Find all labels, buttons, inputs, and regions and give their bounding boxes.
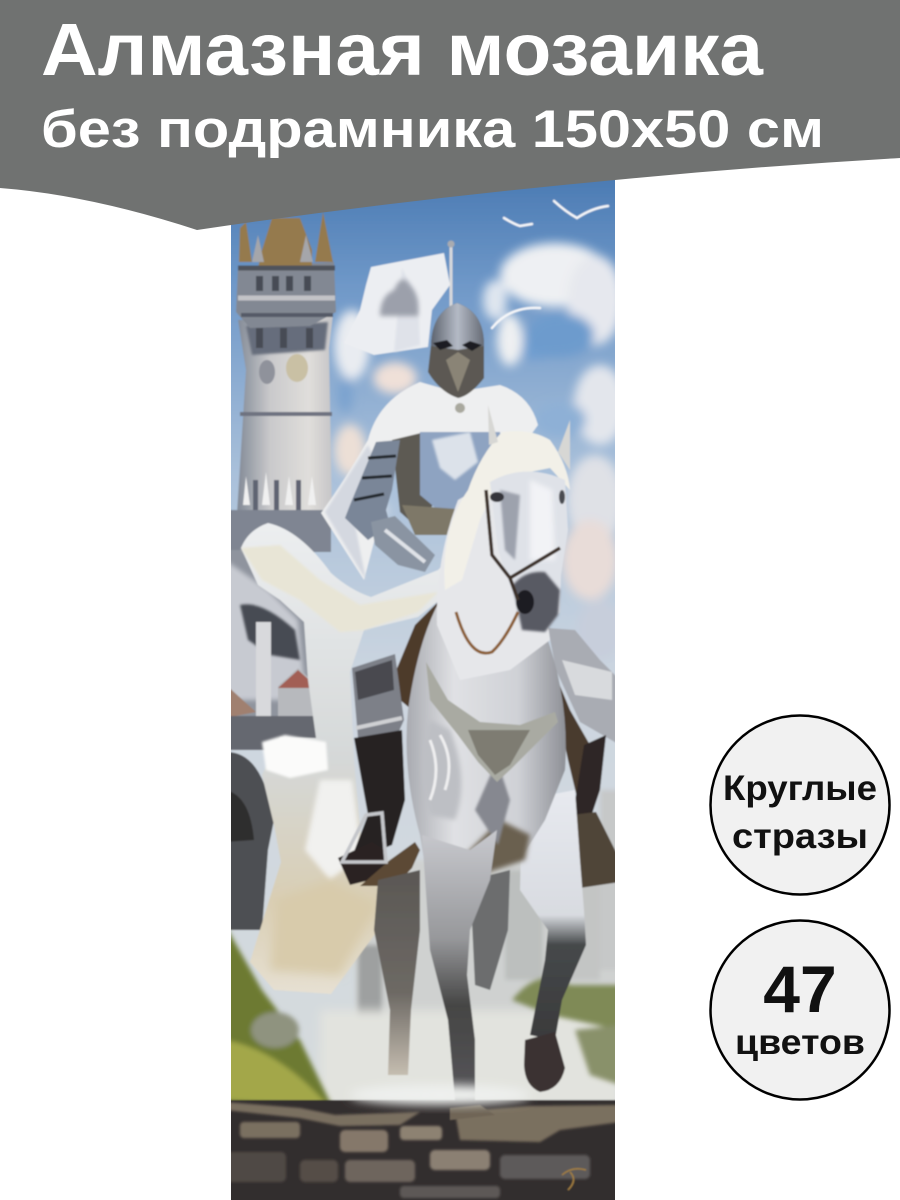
head: [490, 471, 568, 614]
planted front leg: [422, 830, 497, 1100]
header band: [0, 0, 900, 230]
badge: round rhinestones: Круглые: [723, 769, 877, 808]
mist: [320, 1010, 620, 1110]
grass left: [231, 929, 333, 1102]
grass right: [512, 978, 620, 1085]
horse: [374, 405, 586, 1120]
birds: [492, 201, 608, 328]
hind leg right: [470, 870, 510, 990]
flowing cape: [241, 523, 456, 994]
breastplate: [419, 431, 501, 510]
body: [406, 606, 567, 850]
clouds: [329, 236, 615, 606]
badge: 47 colours: цветов: [735, 1023, 865, 1062]
badge: round rhinestones: [710, 716, 890, 894]
title: Алмазная мозаика: [41, 8, 764, 91]
helmet: [428, 303, 484, 398]
bridle: [486, 490, 560, 600]
gauntlet: [371, 516, 435, 572]
subtitle: без подрамника 150х50 см: [41, 100, 824, 159]
arm: [345, 440, 400, 540]
hind leg left: [374, 870, 420, 1075]
badge: 47 colours: [710, 920, 890, 1100]
right leg armour: [548, 628, 620, 745]
muzzle: [513, 572, 560, 632]
raised leg: [520, 790, 586, 1040]
splash: [350, 1085, 530, 1105]
knight: [321, 303, 620, 888]
left boot: [353, 729, 406, 852]
sky: [231, 180, 615, 1084]
stone path: [225, 1100, 620, 1200]
neck: [436, 496, 550, 678]
ears: [488, 405, 570, 470]
left leg armour: [352, 654, 404, 738]
breast ornament: [426, 662, 558, 782]
distant castle right: [354, 789, 615, 1016]
painting: knight on white horse: [220, 160, 626, 1200]
eye: [490, 492, 504, 502]
chain mail: [392, 432, 433, 520]
saddle strap: [396, 602, 438, 708]
tower: [225, 212, 336, 930]
badge: round rhinestones: стразы: [732, 817, 868, 856]
flag: [344, 240, 454, 355]
right boot: [572, 735, 606, 820]
badge: 47 colours: 47: [763, 952, 837, 1026]
upper cape: [321, 382, 538, 580]
mane: [444, 431, 570, 590]
